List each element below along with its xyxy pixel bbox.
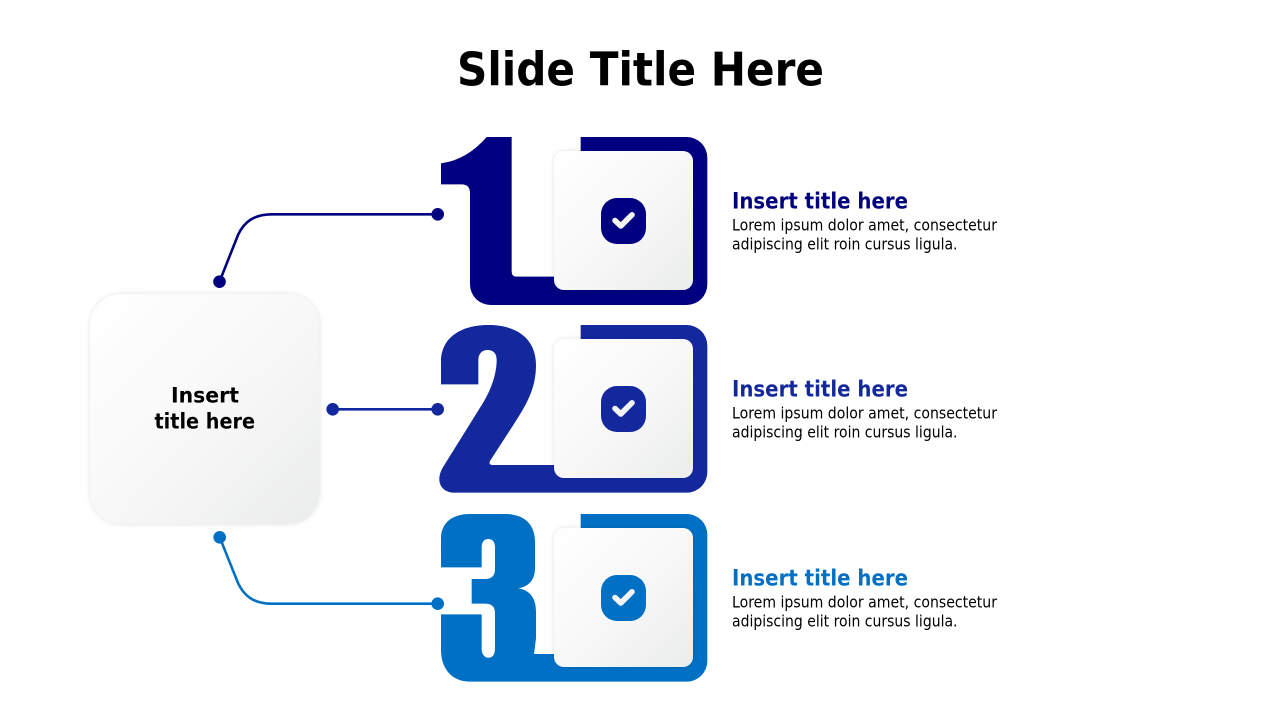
card 3: [554, 528, 693, 667]
text: item 2: Lorem ipsum dolor amet, consectetur: [732, 404, 997, 423]
icon: check 1: [601, 198, 646, 244]
panel: item 1: [441, 137, 707, 305]
card 1: [554, 151, 693, 290]
text: item 1: Insert title here: [732, 190, 908, 214]
text: item 1: adipiscing elit roin cursus ligula.: [732, 234, 958, 254]
text: item 2: Insert title here: [732, 378, 908, 402]
text: item 2: [732, 378, 1002, 442]
numeral 1: [441, 137, 707, 305]
numeral 3: [441, 514, 707, 682]
panel: central box: [90, 294, 320, 524]
text: item 3: Lorem ipsum dolor amet, consectetur: [732, 593, 997, 612]
icon: check 3: [601, 575, 646, 621]
text: item 1: Lorem ipsum dolor amet, consectetur: [732, 216, 997, 235]
central box title: title here: [154, 410, 255, 434]
text: item 3: adipiscing elit roin cursus ligula.: [732, 612, 958, 630]
text: item 2: adipiscing elit roin cursus ligula.: [732, 422, 958, 442]
icon: check 2: [601, 386, 646, 432]
card 2: [554, 339, 693, 478]
text: item 1: [732, 190, 1002, 254]
central box title: Insert: [171, 384, 239, 408]
title: Slide Title Here: [457, 42, 824, 96]
panel: item 2: [439, 325, 707, 493]
numeral 2: [439, 325, 707, 493]
connector 2: [326, 403, 444, 416]
text: item 3: Insert title here: [732, 566, 908, 592]
connector 3: [213, 531, 444, 610]
text: item 3: [732, 566, 1002, 630]
connector 1: [213, 208, 444, 288]
panel: item 3: [441, 514, 707, 682]
